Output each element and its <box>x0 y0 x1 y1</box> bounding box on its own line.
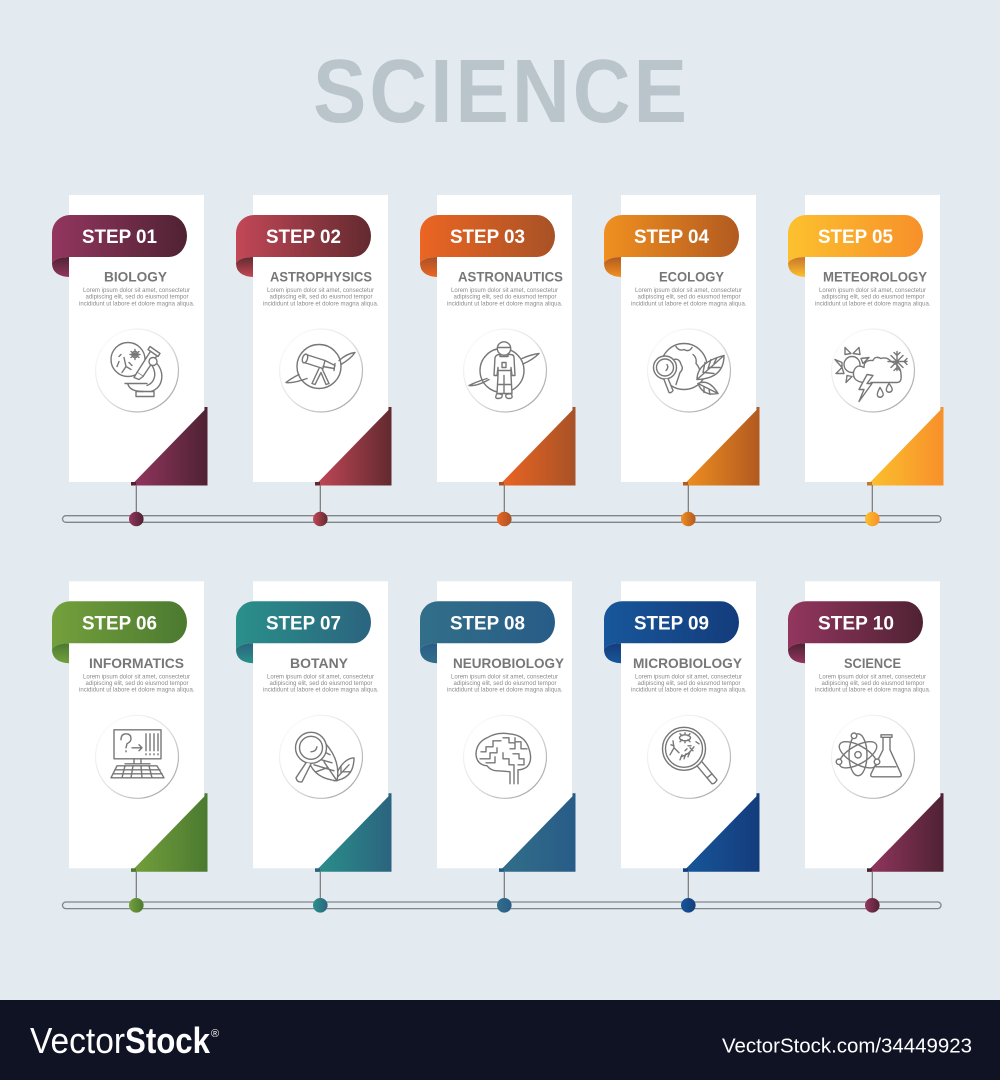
panel: step 09 microbiology <box>604 581 760 913</box>
corner fold <box>867 793 944 872</box>
footer logo: Vector <box>30 1020 125 1061</box>
corner fold <box>315 793 392 872</box>
description text: Lorem ipsum dolor sit amet, consectetur <box>451 288 558 294</box>
description text: incididunt ut labore et dolore magna aliqua. <box>815 688 931 694</box>
connector <box>129 482 144 526</box>
connector <box>497 868 512 913</box>
icon: atom and flask <box>832 715 914 798</box>
description text: incididunt ut labore et dolore magna aliqua. <box>815 301 931 307</box>
panel: step 10 science <box>788 581 944 913</box>
card background <box>437 195 572 482</box>
heading: biology: BIOLOGY <box>104 268 168 284</box>
ribbon: step 03 <box>420 215 555 277</box>
ribbon: step 07 <box>236 601 371 663</box>
timeline: bottom row <box>62 902 941 909</box>
description text: incididunt ut labore et dolore magna aliqua. <box>631 301 747 307</box>
description text <box>447 674 563 694</box>
panel: step 05 meteorology <box>788 195 944 526</box>
panel: step 07 botany <box>236 581 392 913</box>
footer logo: Stock <box>125 1020 211 1061</box>
connector <box>129 868 144 913</box>
heading: neurobiology: NEUROBIOLOGY <box>453 655 565 671</box>
heading: astrophysics: ASTROPHYSICS <box>270 268 372 284</box>
footer image id: VectorStock.com/34449923 <box>722 1036 972 1058</box>
description text: incididunt ut labore et dolore magna aliqua. <box>631 688 747 694</box>
heading: astronautics: ASTRONAUTICS <box>458 268 563 284</box>
description text <box>631 288 747 307</box>
icon: magnifier with germs <box>648 715 730 798</box>
ribbon: step 06 <box>52 601 187 663</box>
card background <box>253 195 388 482</box>
corner fold <box>131 407 208 486</box>
connector <box>313 482 328 526</box>
ribbon: step 10: STEP 10 <box>818 613 894 634</box>
connector <box>681 868 696 913</box>
description text <box>263 674 379 694</box>
card background <box>69 581 204 868</box>
icon: computer <box>96 715 178 798</box>
panel: step 08 neurobiology <box>420 581 576 913</box>
description text: Lorem ipsum dolor sit amet, consectetur <box>83 674 190 680</box>
title: SCIENCE <box>313 42 687 142</box>
description text: adipiscing elit, sed do eiusmod tempor <box>86 681 188 687</box>
description text: incididunt ut labore et dolore magna aliqua. <box>447 301 563 307</box>
panel: step 01 biology <box>52 195 208 526</box>
footer bar <box>0 1000 1000 1080</box>
footer logo <box>30 1020 219 1061</box>
corner fold <box>315 407 392 486</box>
panel: step 04 ecology <box>604 195 760 526</box>
heading: ecology: ECOLOGY <box>659 268 725 284</box>
ribbon: step 04 <box>604 215 739 277</box>
card background <box>621 581 756 868</box>
ribbon: step 06: STEP 06 <box>82 613 157 634</box>
ribbon: step 02 <box>236 215 371 277</box>
description text: Lorem ipsum dolor sit amet, consectetur <box>635 674 742 680</box>
ribbon: step 07: STEP 07 <box>266 613 341 634</box>
description text: adipiscing elit, sed do eiusmod tempor <box>86 295 188 301</box>
card background <box>621 195 756 482</box>
ribbon: step 03: STEP 03 <box>450 227 525 248</box>
heading: science: SCIENCE <box>844 655 901 671</box>
card background <box>805 195 940 482</box>
panel: step 03 astronautics <box>420 195 576 526</box>
description text: adipiscing elit, sed do eiusmod tempor <box>270 295 372 301</box>
description text <box>631 674 747 694</box>
ribbon: step 02: STEP 02 <box>266 227 341 248</box>
connector <box>865 482 880 526</box>
icon: telescope and planet <box>280 329 362 412</box>
ribbon: step 08 <box>420 601 555 663</box>
panel: step 02 astrophysics <box>236 195 392 526</box>
ribbon: step 08: STEP 08 <box>450 613 525 634</box>
description text <box>815 288 931 307</box>
description text: Lorem ipsum dolor sit amet, consectetur <box>267 674 374 680</box>
connector <box>681 482 696 526</box>
footer logo: ® <box>211 1028 219 1040</box>
card background <box>437 581 572 868</box>
corner fold <box>499 407 576 486</box>
card background <box>69 195 204 482</box>
ribbon: step 05 <box>788 215 923 277</box>
description text: adipiscing elit, sed do eiusmod tempor <box>638 681 740 687</box>
corner fold <box>867 407 944 486</box>
description text: adipiscing elit, sed do eiusmod tempor <box>638 295 740 301</box>
icon: magnifier and leaves <box>280 715 362 798</box>
description text <box>447 288 563 307</box>
description text: adipiscing elit, sed do eiusmod tempor <box>822 295 924 301</box>
card background <box>253 581 388 868</box>
heading: botany: BOTANY <box>290 655 349 671</box>
ribbon: step 09 <box>604 601 739 663</box>
connector <box>313 868 328 913</box>
description text: adipiscing elit, sed do eiusmod tempor <box>454 681 556 687</box>
description text: Lorem ipsum dolor sit amet, consectetur <box>635 288 742 294</box>
icon: astronaut <box>464 329 546 412</box>
ribbon: step 04: STEP 04 <box>634 227 709 248</box>
heading: informatics: INFORMATICS <box>89 655 184 671</box>
icon: microscope <box>96 329 178 412</box>
corner fold <box>131 793 208 872</box>
description text: incididunt ut labore et dolore magna aliqua. <box>79 301 195 307</box>
description text: Lorem ipsum dolor sit amet, consectetur <box>819 288 926 294</box>
description text: Lorem ipsum dolor sit amet, consectetur <box>451 674 558 680</box>
description text: Lorem ipsum dolor sit amet, consectetur <box>267 288 374 294</box>
description text: adipiscing elit, sed do eiusmod tempor <box>270 681 372 687</box>
description text: incididunt ut labore et dolore magna aliqua. <box>263 688 379 694</box>
description text <box>79 288 195 307</box>
description text: incididunt ut labore et dolore magna aliqua. <box>79 688 195 694</box>
description text <box>79 674 195 694</box>
heading: meteorology: METEOROLOGY <box>823 268 928 284</box>
description text: adipiscing elit, sed do eiusmod tempor <box>822 681 924 687</box>
corner fold <box>683 793 760 872</box>
description text: Lorem ipsum dolor sit amet, consectetur <box>83 288 190 294</box>
panel: step 06 informatics <box>52 581 208 913</box>
icon: brain <box>464 715 546 798</box>
description text: incididunt ut labore et dolore magna aliqua. <box>447 688 563 694</box>
ribbon: step 05: STEP 05 <box>818 227 893 248</box>
corner fold <box>499 793 576 872</box>
description text: adipiscing elit, sed do eiusmod tempor <box>454 295 556 301</box>
description text <box>263 288 379 307</box>
icon: globe, magnifier and leaves <box>648 329 730 412</box>
connector <box>865 868 880 913</box>
card background <box>805 581 940 868</box>
corner fold <box>683 407 760 486</box>
ribbon: step 09: STEP 09 <box>634 613 709 634</box>
timeline: top row <box>62 516 941 522</box>
ribbon: step 01: STEP 01 <box>82 227 157 248</box>
heading: microbiology: MICROBIOLOGY <box>633 655 743 671</box>
description text <box>815 674 931 694</box>
connector <box>497 482 512 526</box>
description text: incididunt ut labore et dolore magna aliqua. <box>263 301 379 307</box>
ribbon: step 10 <box>788 601 923 663</box>
description text: Lorem ipsum dolor sit amet, consectetur <box>819 674 926 680</box>
icon: sun, cloud, lightning and snowflake <box>832 329 914 412</box>
ribbon: step 01 <box>52 215 187 277</box>
